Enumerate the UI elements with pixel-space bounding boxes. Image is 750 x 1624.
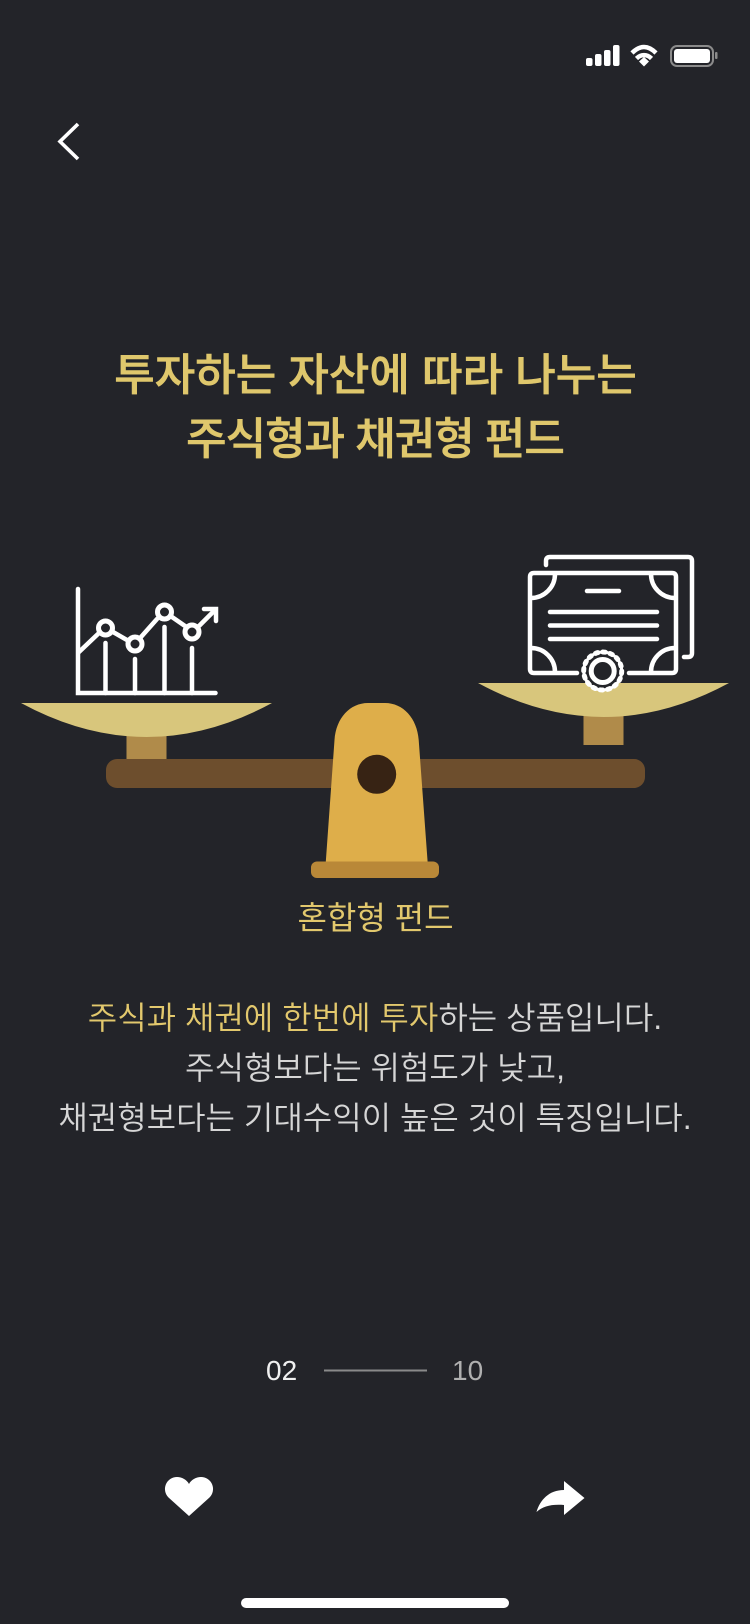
icon: signal xyxy=(586,45,620,66)
icon: bond certificate xyxy=(530,557,692,690)
beam xyxy=(106,759,645,788)
page indicator xyxy=(266,1355,483,1386)
description: 주식형보다는 위험도가 낮고, xyxy=(185,1050,565,1086)
description: 주식과 채권에 한번에 투자하는 상품입니다. xyxy=(88,1000,662,1036)
fulcrum xyxy=(326,703,428,863)
pivot xyxy=(357,755,396,794)
icon: battery xyxy=(671,46,718,66)
home indicator xyxy=(241,1598,509,1608)
title: 주식형과 채권형 펀드 xyxy=(186,415,564,464)
page indicator: 02 xyxy=(266,1355,297,1386)
title: 투자하는 자산에 따라 나누는 xyxy=(114,351,637,400)
status bar icons xyxy=(586,45,718,66)
fulcrum base xyxy=(311,862,439,878)
right pan xyxy=(478,683,729,717)
back arrow xyxy=(60,124,78,159)
title xyxy=(114,351,637,464)
page indicator: 10 xyxy=(452,1355,483,1386)
description xyxy=(58,1000,692,1136)
scale label: 혼합형 펀드 xyxy=(297,900,454,936)
left pan xyxy=(21,703,272,737)
icon: stock chart xyxy=(78,589,216,693)
left post xyxy=(126,735,166,760)
balance scale illustration xyxy=(21,557,729,878)
description: 채권형보다는 기대수익이 높은 것이 특징입니다. xyxy=(58,1100,692,1136)
icon: wifi xyxy=(632,47,656,66)
seal xyxy=(584,652,622,690)
icon: share arrow xyxy=(536,1481,584,1515)
right post xyxy=(584,715,624,745)
icon: heart xyxy=(165,1477,213,1516)
